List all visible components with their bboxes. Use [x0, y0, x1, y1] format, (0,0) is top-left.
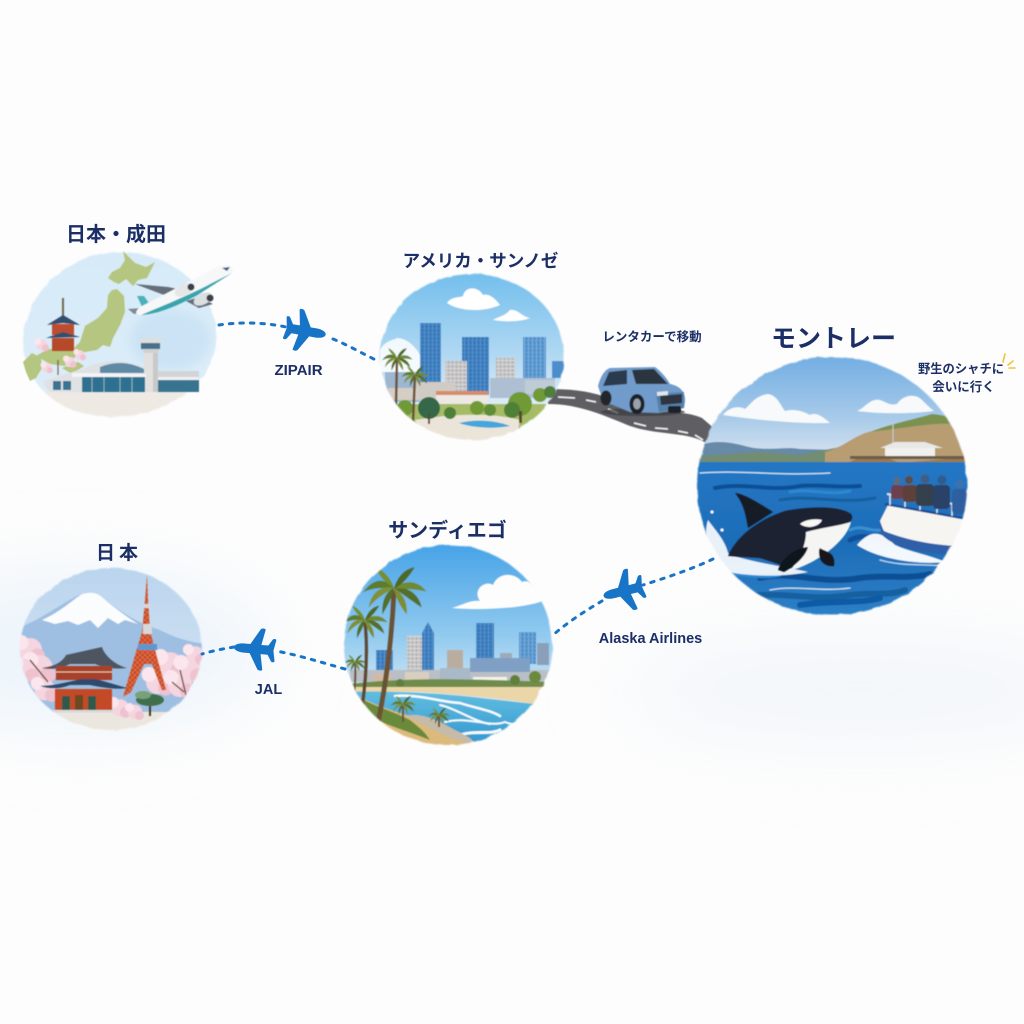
heading: Monterey: モントレー [771, 325, 896, 353]
sky wash [22, 252, 217, 392]
panel: San Diego [343, 544, 554, 746]
passengers [891, 474, 968, 514]
Tokyo Tower [123, 575, 166, 697]
icon: plane [599, 566, 649, 617]
distant hills [695, 442, 840, 462]
panel: Narita [22, 252, 217, 418]
heading: Narita: 日本・成田 [66, 222, 166, 246]
sky [24, 567, 202, 644]
Mount Fuji [21, 594, 202, 712]
background wash [0, 575, 1024, 740]
route: San Jose to Monterey label: レンタカーで移動 [602, 329, 702, 344]
orca [728, 493, 852, 572]
label: JAL: JAL [255, 682, 282, 698]
palm trees [343, 567, 450, 727]
icon: sparkle [1003, 354, 1015, 368]
airport ground [45, 392, 186, 418]
label: ZIPAIR: ZIPAIR [274, 362, 323, 379]
heading: San Diego: サンディエゴ [388, 518, 507, 542]
water bands [700, 472, 945, 605]
tour boat [878, 494, 968, 554]
cherry blossoms [10, 635, 206, 720]
waves [395, 696, 525, 735]
beach and sea [345, 687, 545, 705]
panel: Monterey [690, 350, 975, 625]
route: San Diego to Japan with JAL [202, 626, 345, 698]
small pine tree [135, 691, 164, 716]
rock shelf [850, 458, 966, 462]
pagoda and blossoms [34, 298, 86, 375]
cloud [452, 575, 545, 609]
sky [378, 272, 564, 405]
heading: San Jose: アメリカ・サンノゼ [403, 251, 559, 271]
heading: Japan: 日本 [96, 542, 142, 564]
pier building [850, 422, 965, 459]
sky [343, 544, 554, 704]
map of Japan [23, 251, 155, 381]
airport terminal and tower [44, 338, 199, 392]
icon: plane [232, 626, 277, 672]
park and pond [396, 404, 548, 430]
skyline [385, 323, 565, 410]
route: Narita to San Jose with ZIPAIR [219, 307, 380, 379]
callout: wild orca: 野生のシャチに [918, 361, 1004, 376]
route: Monterey to San Diego with Alaska Airlines [553, 559, 713, 647]
callout: wild orca [918, 354, 1015, 394]
skyline [350, 622, 550, 692]
clouds [380, 288, 530, 372]
ocean [690, 462, 975, 625]
headland [824, 422, 964, 463]
icon: plane [281, 307, 329, 355]
palm trees [382, 348, 429, 422]
panel: San Jose [378, 272, 565, 442]
label: Alaska Airlines: Alaska Airlines [599, 631, 702, 647]
panel: Japan [20, 567, 203, 731]
trees [397, 386, 556, 424]
airliner [128, 265, 233, 315]
foreground shore [358, 696, 475, 746]
sky [704, 356, 947, 450]
splash and wake [704, 510, 945, 576]
clouds [723, 394, 934, 423]
icon: rental car [598, 367, 685, 416]
temple gate [40, 647, 128, 712]
callout: wild orca: 会いに行く [932, 379, 995, 394]
route: road between San Jose and Monterey [548, 389, 716, 444]
ground [54, 712, 169, 731]
